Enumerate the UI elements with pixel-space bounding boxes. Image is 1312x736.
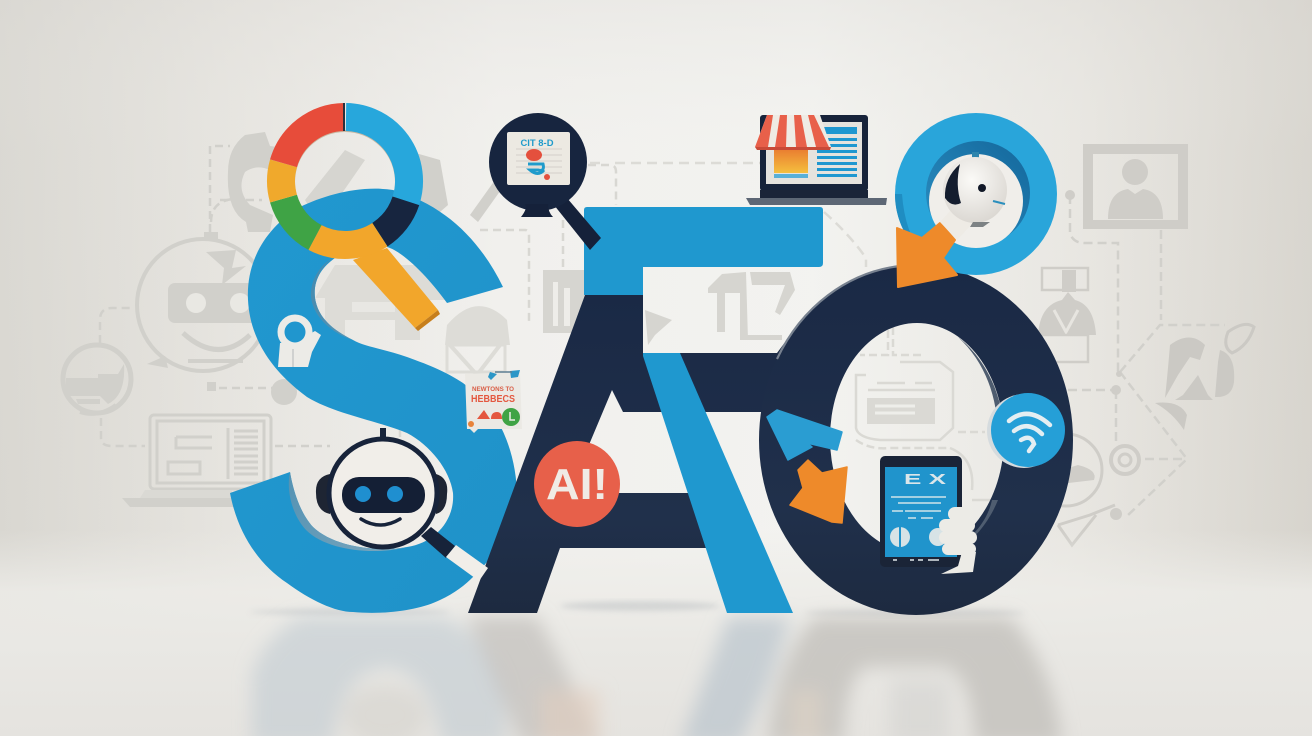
magnifier grip <box>421 527 455 558</box>
hand <box>939 507 977 574</box>
letter S <box>230 189 517 613</box>
icon: magnifier with document <box>489 113 601 250</box>
icon: laptop with storefront <box>746 115 887 205</box>
icon: tablet held by hand <box>880 456 977 574</box>
icon: orange arrow lower <box>790 460 847 523</box>
note text: NEWTONS TO <box>472 387 514 393</box>
ghost icon: store behind S <box>315 165 616 440</box>
ghost icon: printer inside O <box>856 327 1000 500</box>
ghost icon: right fish emblem <box>1155 324 1254 430</box>
icon: wifi badge <box>987 393 1065 468</box>
icon: robot with magnifier <box>316 428 488 581</box>
ghost icon: gear and check top left <box>220 132 503 250</box>
AI text: AI! <box>546 460 608 509</box>
floor <box>0 530 1312 736</box>
contact shadow <box>250 601 1025 616</box>
icon: google magnifier <box>281 103 440 331</box>
ghost icon: laptop <box>122 415 271 507</box>
magnifier ring segments <box>346 117 409 201</box>
letter O <box>759 265 1073 615</box>
AI badge <box>534 441 620 527</box>
icon: white hand on S <box>278 318 321 367</box>
ghost icon: left robot network <box>63 146 330 446</box>
S inner bevel <box>289 258 407 551</box>
laptop base <box>746 198 887 205</box>
icon: blue cursor arrow <box>767 410 842 460</box>
icon: orange arrow upper <box>897 223 957 287</box>
icon: robot head in ring <box>940 152 1007 240</box>
note heading: HEBBECS <box>471 394 515 405</box>
robot face <box>342 477 425 513</box>
blue ring top right <box>895 113 1057 275</box>
magnifier handle <box>353 248 438 328</box>
letter T: top blue bar of F <box>584 207 823 295</box>
screen content rows <box>817 127 857 134</box>
robot ears <box>316 474 330 514</box>
awning <box>755 115 831 147</box>
letter A (dark) <box>468 295 830 613</box>
blue diagonal leg <box>643 353 793 613</box>
icon: pinned sticky note <box>465 370 522 433</box>
ghost icon: right frame and person <box>1030 144 1225 545</box>
tablet heading: E X <box>904 471 946 488</box>
robot antenna <box>380 428 386 443</box>
floor reflection <box>252 616 1062 736</box>
ghost icon: bar chart and table <box>543 163 866 345</box>
document title: CIT 8-D <box>520 138 554 148</box>
